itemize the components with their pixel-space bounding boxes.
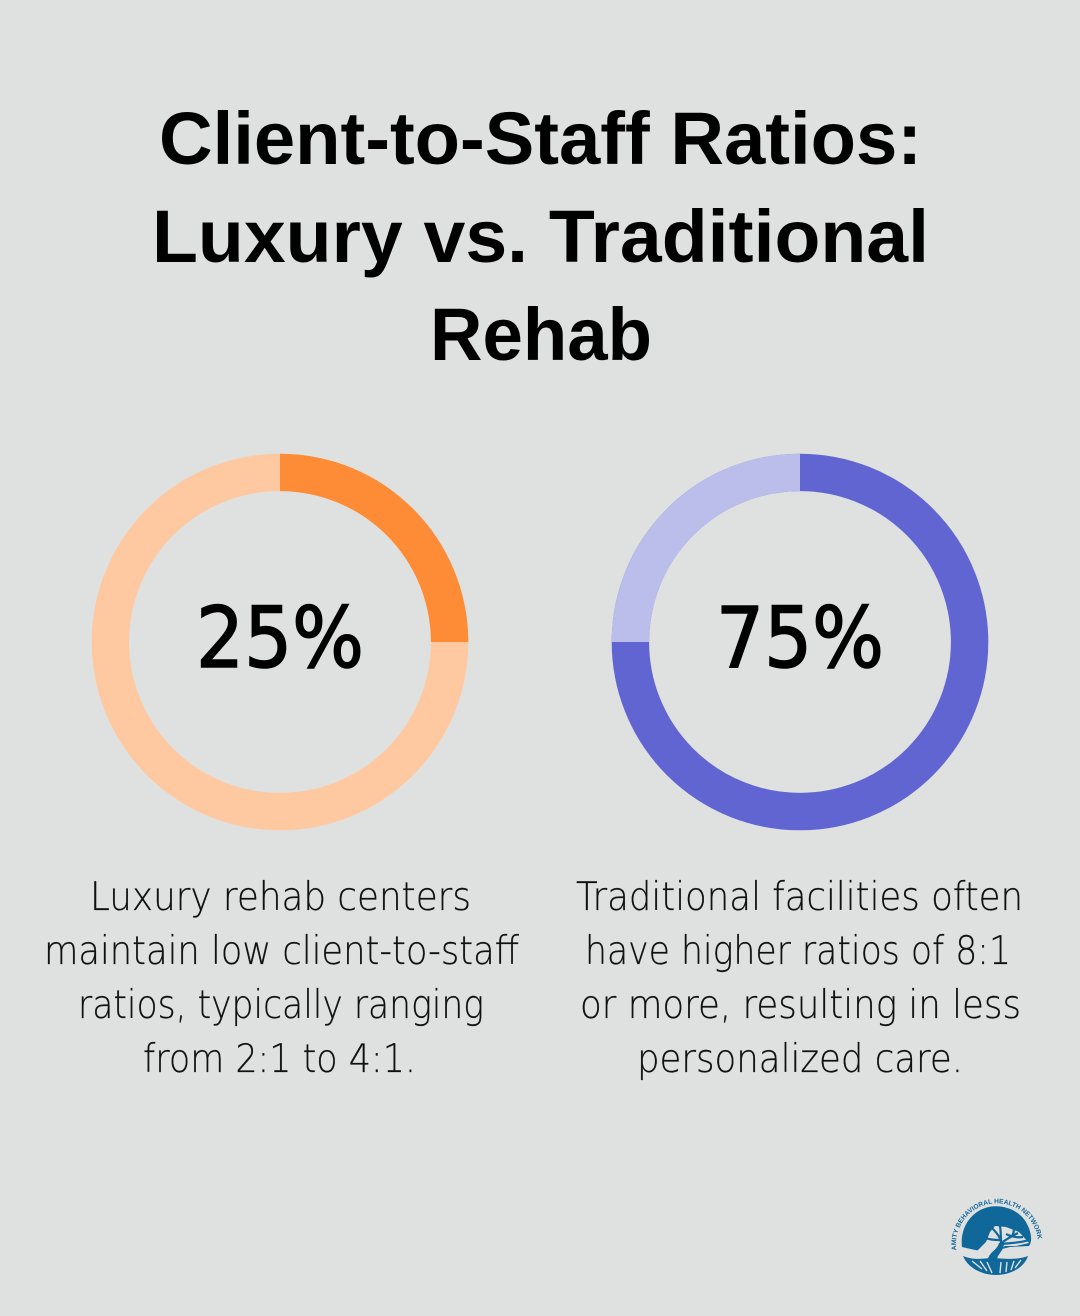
text: luxury description: ratios, typically ranging [78,983,484,1028]
donut chart: 25% [110,454,468,812]
logo: tree canopy [962,1206,1031,1252]
text: luxury description: Luxury rehab centers [90,875,471,920]
text: traditional description: Traditional facilities often [576,875,1023,920]
panel: luxury rehab [44,454,519,1082]
text: luxury description [44,875,519,1082]
text: traditional description [576,875,1023,1082]
logo: Amity Behavioral Health Network [951,1198,1042,1275]
title: Luxury vs. Traditional [152,195,929,278]
text: traditional description: personalized care. [637,1037,963,1082]
logo: network name: AMITY BEHAVIORAL HEALTH NETWORK [951,1198,1042,1250]
donut chart: 75% [612,454,970,812]
text: traditional description: have higher ratios of 8:1 [585,929,1011,974]
title: Client-to-Staff Ratios: [159,97,922,180]
donut chart: 25%: 25% [196,589,364,687]
panel: traditional rehab [576,454,1023,1082]
title: Rehab [430,293,652,376]
text: traditional description: or more, resulting in less [580,983,1021,1028]
text: luxury description: maintain low client-to-staff [44,929,519,974]
logo: roots [963,1256,1028,1275]
logo: tree trunk and branches [986,1226,1029,1244]
title [152,97,929,376]
donut chart: 75%: 75% [716,589,884,687]
text: luxury description: from 2:1 to 4:1. [143,1037,416,1082]
